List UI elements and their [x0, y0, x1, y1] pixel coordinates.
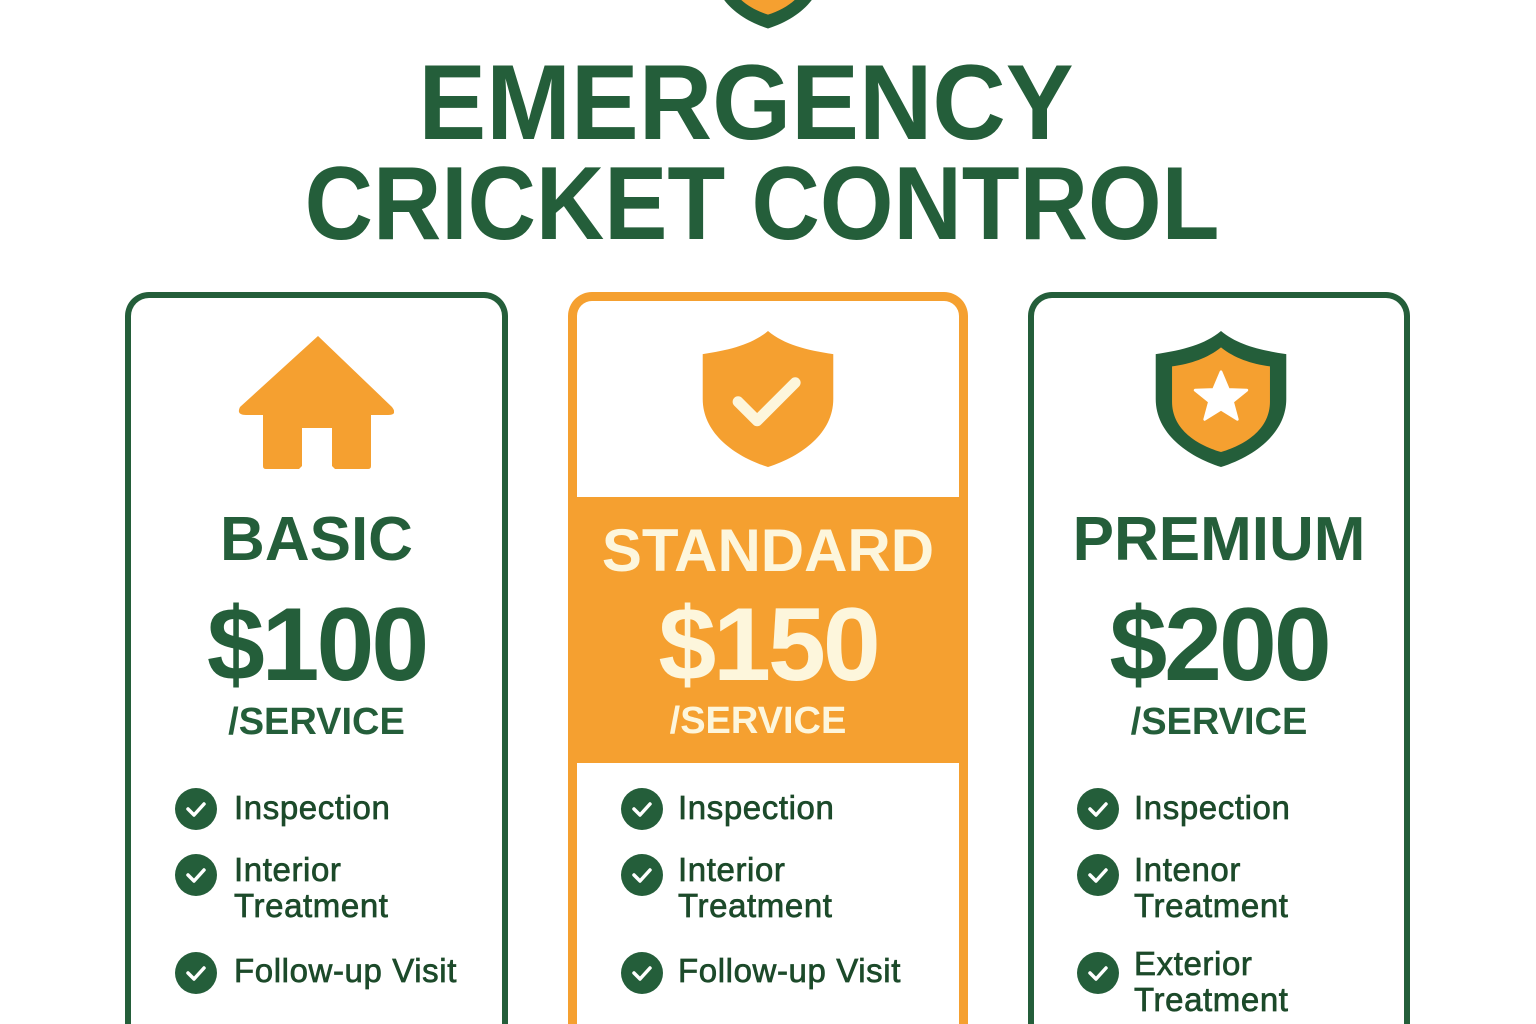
feature list: Inspection [678, 789, 834, 826]
feature list: Inspection [234, 789, 390, 826]
heading: BASIC: BASIC [220, 505, 413, 574]
feature list: Intenor [1134, 851, 1241, 888]
feature list [1077, 788, 1290, 1018]
feature list: Treatment [1134, 981, 1289, 1018]
heading: PREMIUM: PREMIUM [1073, 505, 1365, 574]
feature list: Follow-up Visit [234, 952, 457, 989]
panel: standard [568, 292, 968, 1024]
feature list: Inspection [1134, 789, 1290, 826]
orange band [577, 497, 959, 763]
icon: shield star [1156, 331, 1286, 467]
price: $100 [207, 587, 426, 703]
feature list: Treatment [234, 887, 389, 924]
title [305, 42, 1219, 262]
feature list: Treatment [678, 887, 833, 924]
feature list: Follow-up Visit [678, 952, 901, 989]
panel: premium: /SERVICE [1131, 701, 1307, 743]
feature list: Exterior [1134, 945, 1252, 982]
title: CRICKET CONTROL [305, 146, 1219, 262]
title: EMERGENCY [418, 42, 1074, 162]
feature list: Treatment [1134, 887, 1289, 924]
price: $150 [658, 587, 878, 703]
orange band: /SERVICE [670, 700, 846, 742]
price: $200 [1109, 587, 1329, 703]
feature list: Interior [678, 851, 786, 888]
icon: top shield [724, 0, 812, 28]
icon: house [238, 336, 394, 469]
feature list: Interior [234, 851, 342, 888]
panel: basic: /SERVICE [228, 701, 405, 743]
panel: basic [125, 292, 508, 1024]
icon: shield check [702, 331, 834, 467]
heading: STANDARD: STANDARD [602, 517, 934, 584]
feature list [621, 788, 901, 994]
panel: premium [1028, 292, 1410, 1024]
feature list [175, 788, 457, 994]
